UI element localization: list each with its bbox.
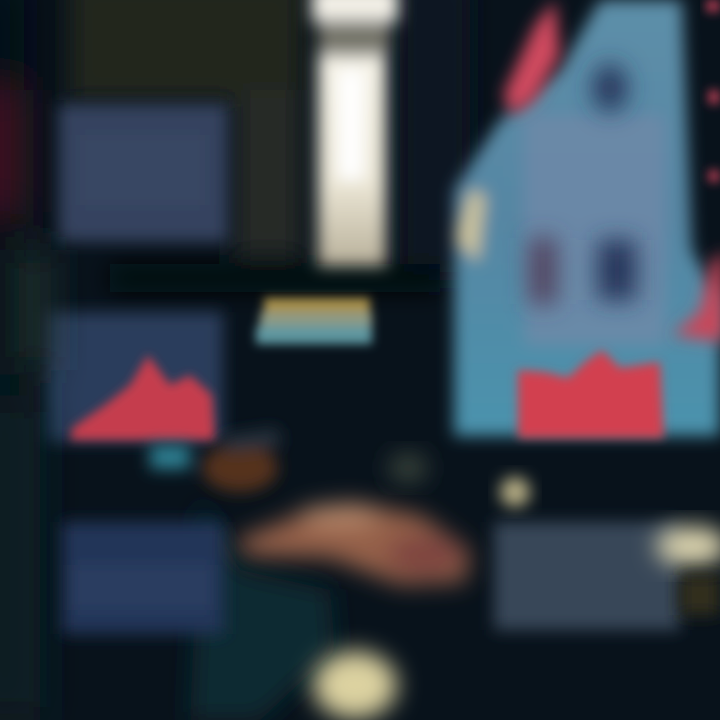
ceiling light [312,0,398,266]
ceiling backdrop [70,0,470,292]
right edge red dots [706,0,720,182]
trader figure [150,428,470,585]
head [150,428,282,492]
red bar chart [518,350,664,438]
panel: central ticker [256,298,372,344]
panel: lower left monitor [62,522,224,634]
panel: left chart monitor [45,312,223,442]
red side accent [672,250,720,342]
panel: lower right monitor [494,522,680,630]
red area chart [70,355,215,440]
arms and hands [232,502,470,585]
dark chart spots [530,64,636,304]
left foreground figure [0,0,48,720]
lamps and highlights [313,453,720,719]
torso [190,500,335,720]
red peak [503,0,560,115]
panel: upper left monitor [58,104,228,242]
panel: right main monitor [454,0,720,438]
